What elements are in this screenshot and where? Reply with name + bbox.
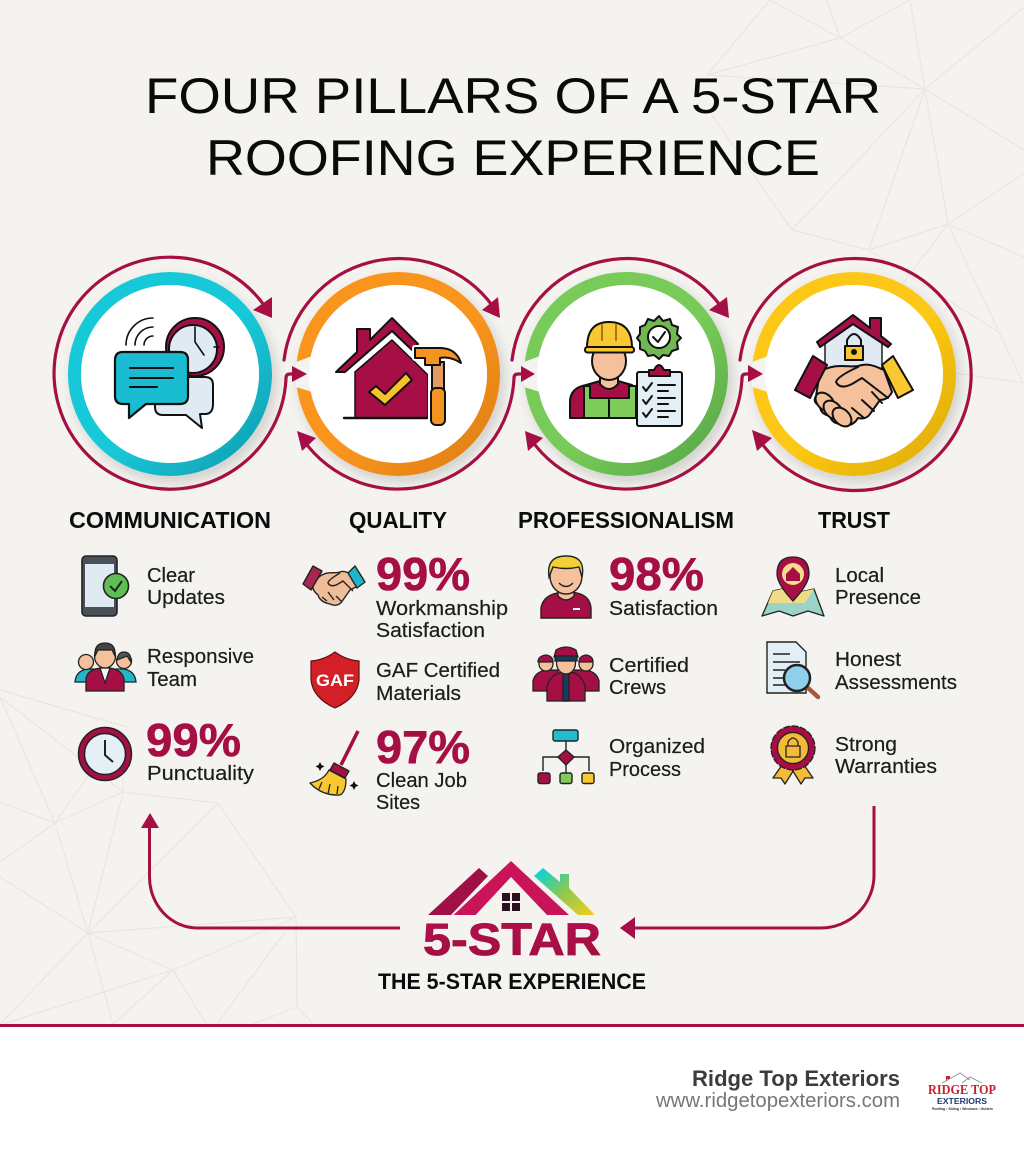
text: gaf certified materials: GAF Certified [376, 660, 500, 682]
text: certified crews: Certified [609, 655, 689, 677]
text: gaf certified materials [376, 660, 500, 705]
stat: 97% clean job sites [376, 721, 470, 814]
heading: communication: COMMUNICATION [69, 507, 271, 533]
text: organized process [609, 736, 705, 781]
column: trust [762, 507, 957, 784]
arrow: 5-star back to communication [141, 813, 400, 928]
arrow: trust to 5-star [620, 806, 874, 939]
stat: 99% punctuality: Punctuality [147, 763, 254, 785]
text: strong warranties: Warranties [835, 756, 937, 778]
text: strong warranties [835, 734, 937, 778]
column: communication [69, 507, 271, 785]
stat: 97% clean job sites: Clean Job [376, 770, 467, 792]
stat: 98% satisfaction: 98% [609, 548, 704, 600]
icon: house over handshake [795, 315, 913, 430]
text: certified crews: Crews [609, 677, 666, 699]
text: responsive team [147, 646, 254, 691]
icon: document and magnifier [767, 642, 818, 697]
icon: GAF shield: GAF [316, 671, 354, 690]
text: responsive team: Team [147, 669, 197, 691]
heading: quality: QUALITY [349, 507, 447, 533]
flow arrows between circles [54, 257, 971, 491]
stat: 99% punctuality: 99% [146, 714, 241, 766]
stat: 99% workmanship satisfaction: Satisfaction [376, 620, 485, 642]
text: responsive team: Responsive [147, 646, 254, 668]
icon: house and hammer [336, 318, 461, 426]
text: certified crews [609, 655, 689, 699]
heading: trust: TRUST [818, 507, 890, 533]
circle: professionalism [524, 278, 722, 470]
stat: 99% punctuality [146, 714, 254, 785]
heading: professionalism: PROFESSIONALISM [518, 507, 734, 533]
arrow: quality top [284, 259, 500, 360]
circle: trust [752, 278, 950, 470]
icon: phone with check [82, 556, 128, 616]
arrow: quality bottom [297, 366, 535, 489]
stat: 98% satisfaction: Satisfaction [609, 598, 718, 620]
footer logo [928, 1073, 996, 1111]
footer logo: EXTERIORS [937, 1097, 988, 1106]
stat: 99% workmanship satisfaction [376, 548, 508, 642]
footer band [0, 1024, 1024, 1154]
stat: 97% clean job sites: 97% [376, 721, 470, 773]
stat: 99% workmanship satisfaction: Workmanship [376, 598, 508, 620]
arrow: trust loop [740, 259, 971, 491]
text: organized process: Organized [609, 736, 705, 758]
stat: 97% clean job sites: Sites [376, 792, 420, 814]
text: clear updates: Clear [147, 565, 195, 587]
icon: map pin [762, 557, 824, 616]
icon: warranty badge [771, 726, 815, 784]
icon: GAF shield [311, 652, 359, 708]
icon: responsive team [75, 643, 136, 691]
text: honest assessments [835, 649, 957, 694]
title: ROOFING EXPERIENCE [206, 130, 820, 186]
text: honest assessments: Honest [835, 649, 901, 671]
column: quality [303, 507, 508, 814]
text: organized process: Process [609, 759, 681, 781]
arrow: professionalism bottom [525, 365, 763, 489]
title [145, 68, 881, 186]
text: local presence: Presence [835, 587, 921, 609]
icon: smiling worker [541, 556, 591, 618]
text: local presence: Local [835, 565, 884, 587]
title: FOUR PILLARS OF A 5-STAR [145, 68, 881, 124]
icon: flow chart [538, 730, 594, 784]
text: clear updates: Updates [147, 587, 225, 609]
column: professionalism [518, 507, 734, 784]
stat: 99% workmanship satisfaction: 99% [376, 548, 470, 600]
stat: 98% satisfaction [609, 548, 718, 620]
icon: handshake [303, 566, 365, 605]
caption: the 5-star experience: THE 5-STAR EXPERIENCE [378, 969, 646, 994]
icon: broom [310, 731, 358, 795]
icon: chat bubbles and clock [115, 318, 224, 428]
footer company name: Ridge Top Exteriors [692, 1066, 900, 1091]
text: clear updates [147, 565, 225, 609]
footer logo: RIDGE TOP [928, 1083, 996, 1098]
logo: 5-star house: 5-STAR [423, 914, 601, 965]
arrow: professionalism top [512, 259, 729, 360]
icon: wall clock [78, 728, 132, 780]
arrow: communication loop [54, 257, 307, 489]
logo: 5-star house [423, 861, 601, 965]
circle: communication [74, 278, 266, 470]
text: local presence [835, 565, 921, 609]
footer logo: Roofing • Siding • Windows • Gutters [932, 1107, 993, 1111]
text: gaf certified materials: Materials [376, 683, 461, 705]
circle: quality [296, 278, 494, 470]
footer url: www.ridgetopexteriors.com [655, 1090, 900, 1112]
icon: worker, gear and checklist [570, 316, 682, 426]
icon: certified crew [533, 647, 599, 701]
text: honest assessments: Assessments [835, 672, 957, 694]
text: strong warranties: Strong [835, 734, 897, 756]
